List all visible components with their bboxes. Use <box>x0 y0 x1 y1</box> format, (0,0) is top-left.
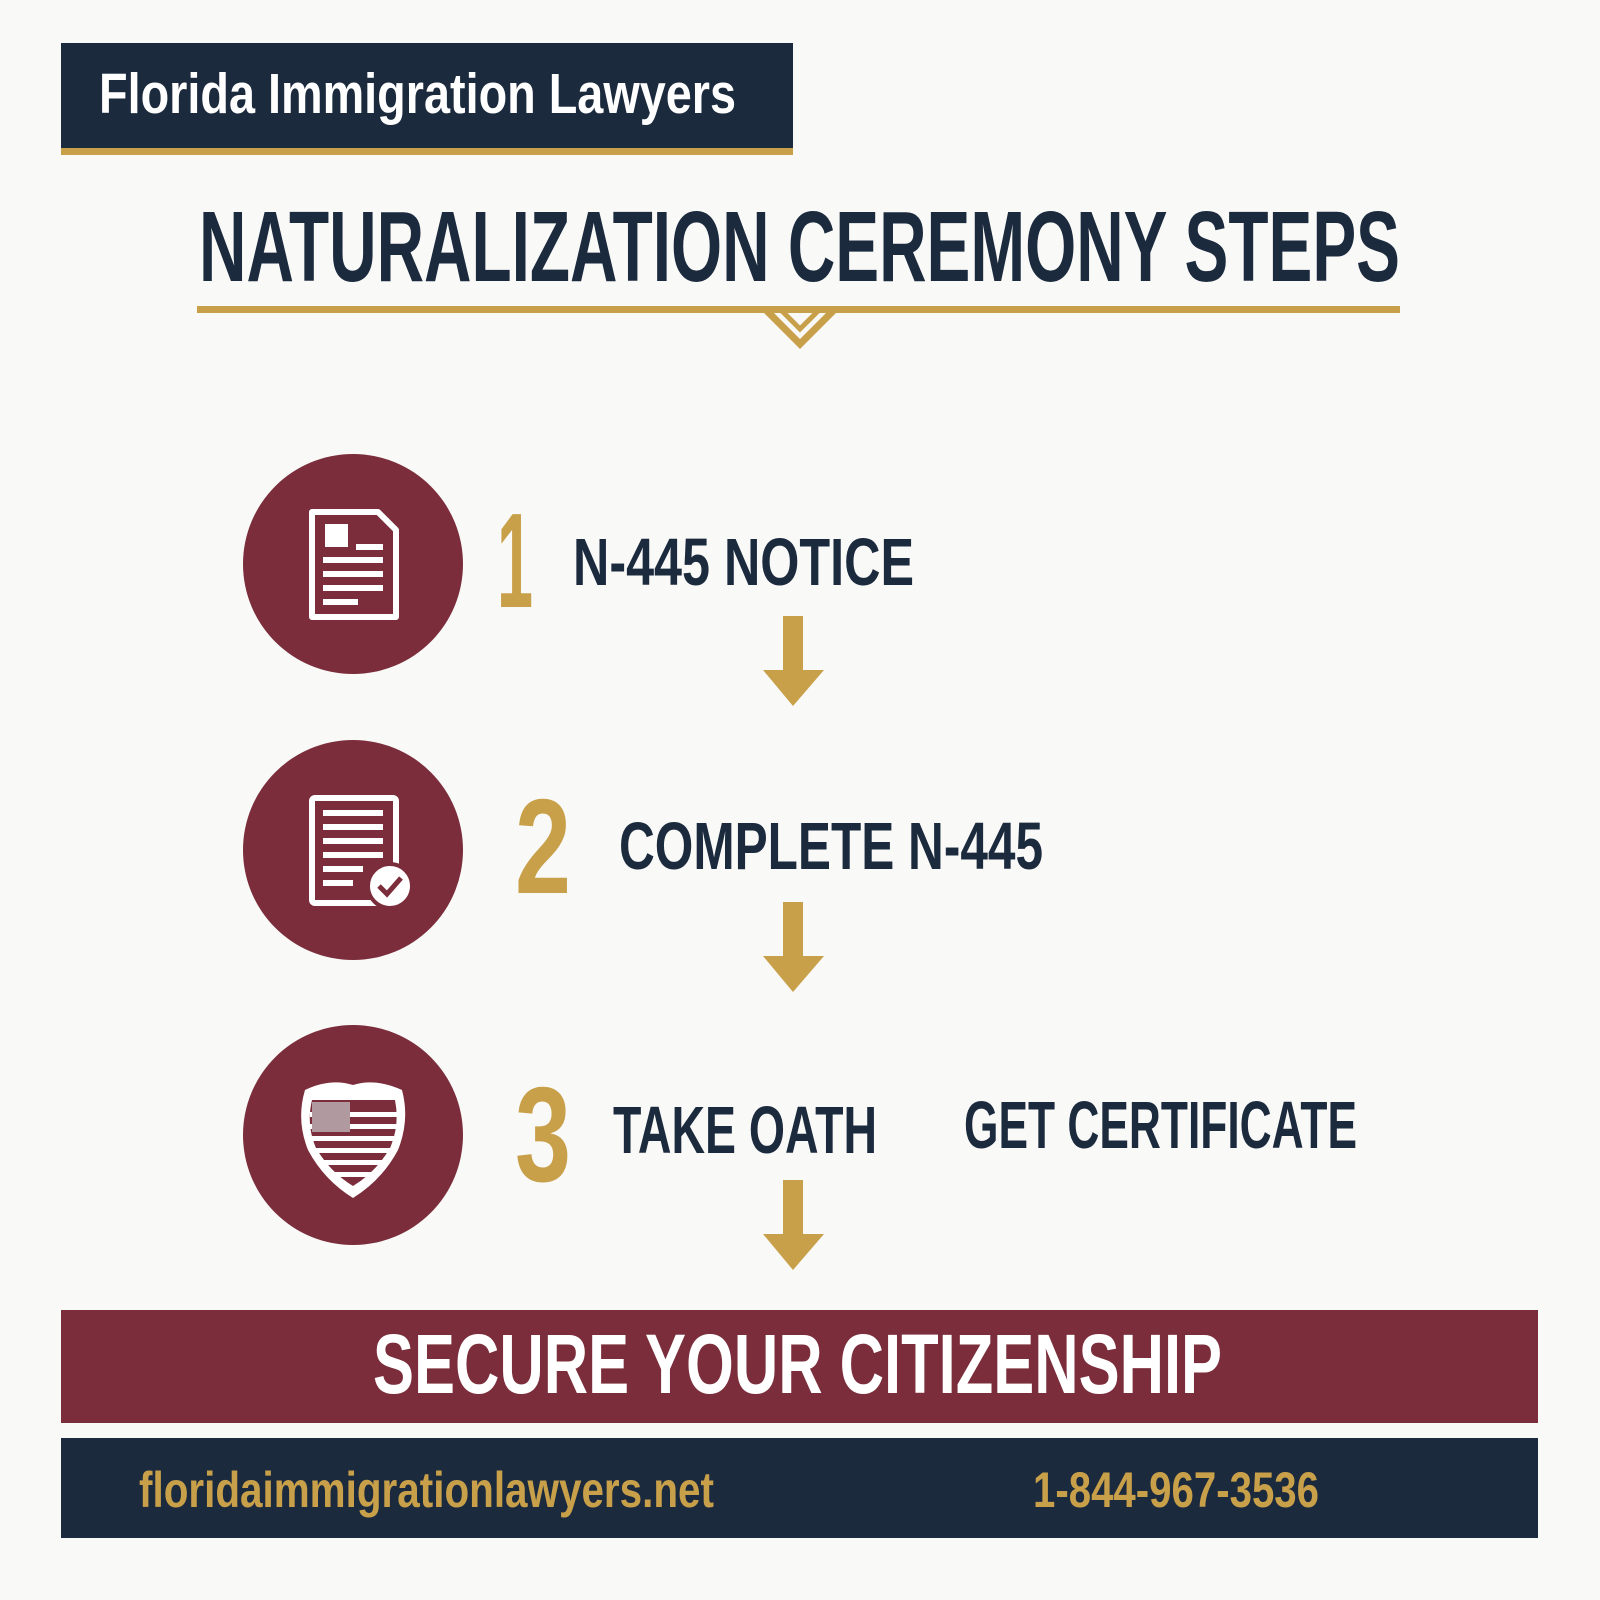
step 2: COMPLETE N-445 <box>619 809 1043 884</box>
icon: document <box>243 454 463 674</box>
footer: contact <box>61 1438 1538 1538</box>
icon: completed form <box>243 740 463 960</box>
icon: flag shield <box>243 1025 463 1245</box>
step 1: N-445 NOTICE <box>573 525 914 600</box>
step 3: GET CERTIFICATE <box>964 1088 1357 1163</box>
step 3: TAKE OATH <box>613 1093 877 1168</box>
arrow 1 <box>763 616 824 706</box>
footer: contact: floridaimmigrationlawyers.net <box>139 1462 714 1518</box>
arrow 2 <box>763 902 824 992</box>
banner: call to action <box>61 1310 1538 1423</box>
footer: contact: 1-844-967-3536 <box>1033 1462 1319 1518</box>
step 1 <box>243 454 914 674</box>
step 2: 2 <box>515 771 571 922</box>
step 2 <box>243 740 1043 960</box>
title <box>197 191 1400 344</box>
header: firm name: Florida Immigration Lawyers <box>99 62 736 126</box>
arrow 3 <box>763 1180 824 1270</box>
step 1: 1 <box>497 485 533 636</box>
banner: call to action: SECURE YOUR CITIZENSHIP <box>373 1317 1222 1411</box>
header: firm name <box>61 43 793 155</box>
step 3 <box>243 1025 1357 1245</box>
step 3: 3 <box>515 1059 571 1210</box>
